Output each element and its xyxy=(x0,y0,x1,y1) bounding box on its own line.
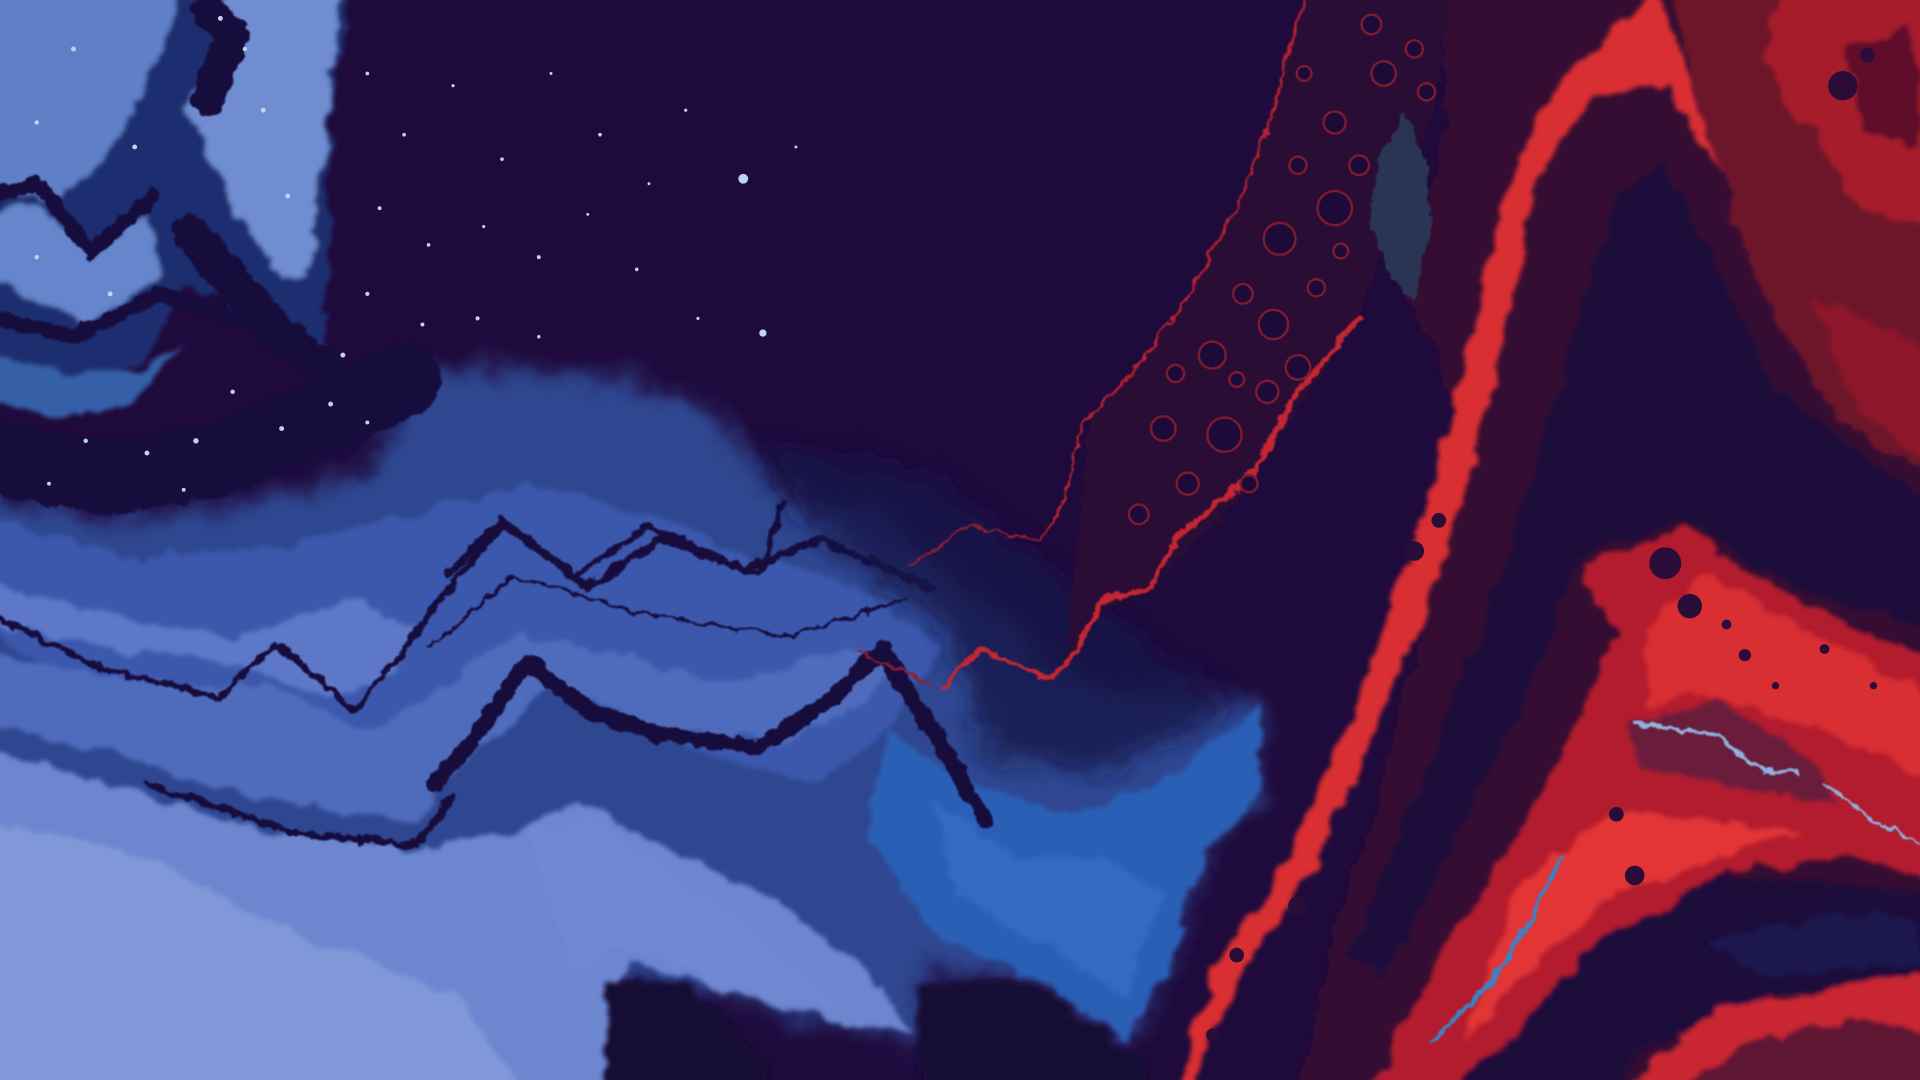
panel: lower right red mass xyxy=(1365,527,1920,1080)
dark pool bottom center xyxy=(606,977,1163,1080)
panel: dark hazy shadow above blue xyxy=(759,441,1237,771)
panel: blue texture upper left xyxy=(0,0,355,416)
star field xyxy=(35,16,797,492)
panel: red lace upper center xyxy=(857,0,1451,686)
dark veins through blue xyxy=(0,12,986,845)
blue streaks in red xyxy=(1433,722,1920,1041)
blue patch lower right xyxy=(1702,912,1920,980)
panel: blue mass lower left xyxy=(0,367,1261,1080)
panel: maroon field upper right xyxy=(1298,0,1920,1080)
grey-blue inclusion xyxy=(1369,113,1430,300)
lace holes xyxy=(1129,15,1435,524)
red mass holes xyxy=(1206,48,1877,1041)
bright red ribbon xyxy=(1176,0,1720,1080)
